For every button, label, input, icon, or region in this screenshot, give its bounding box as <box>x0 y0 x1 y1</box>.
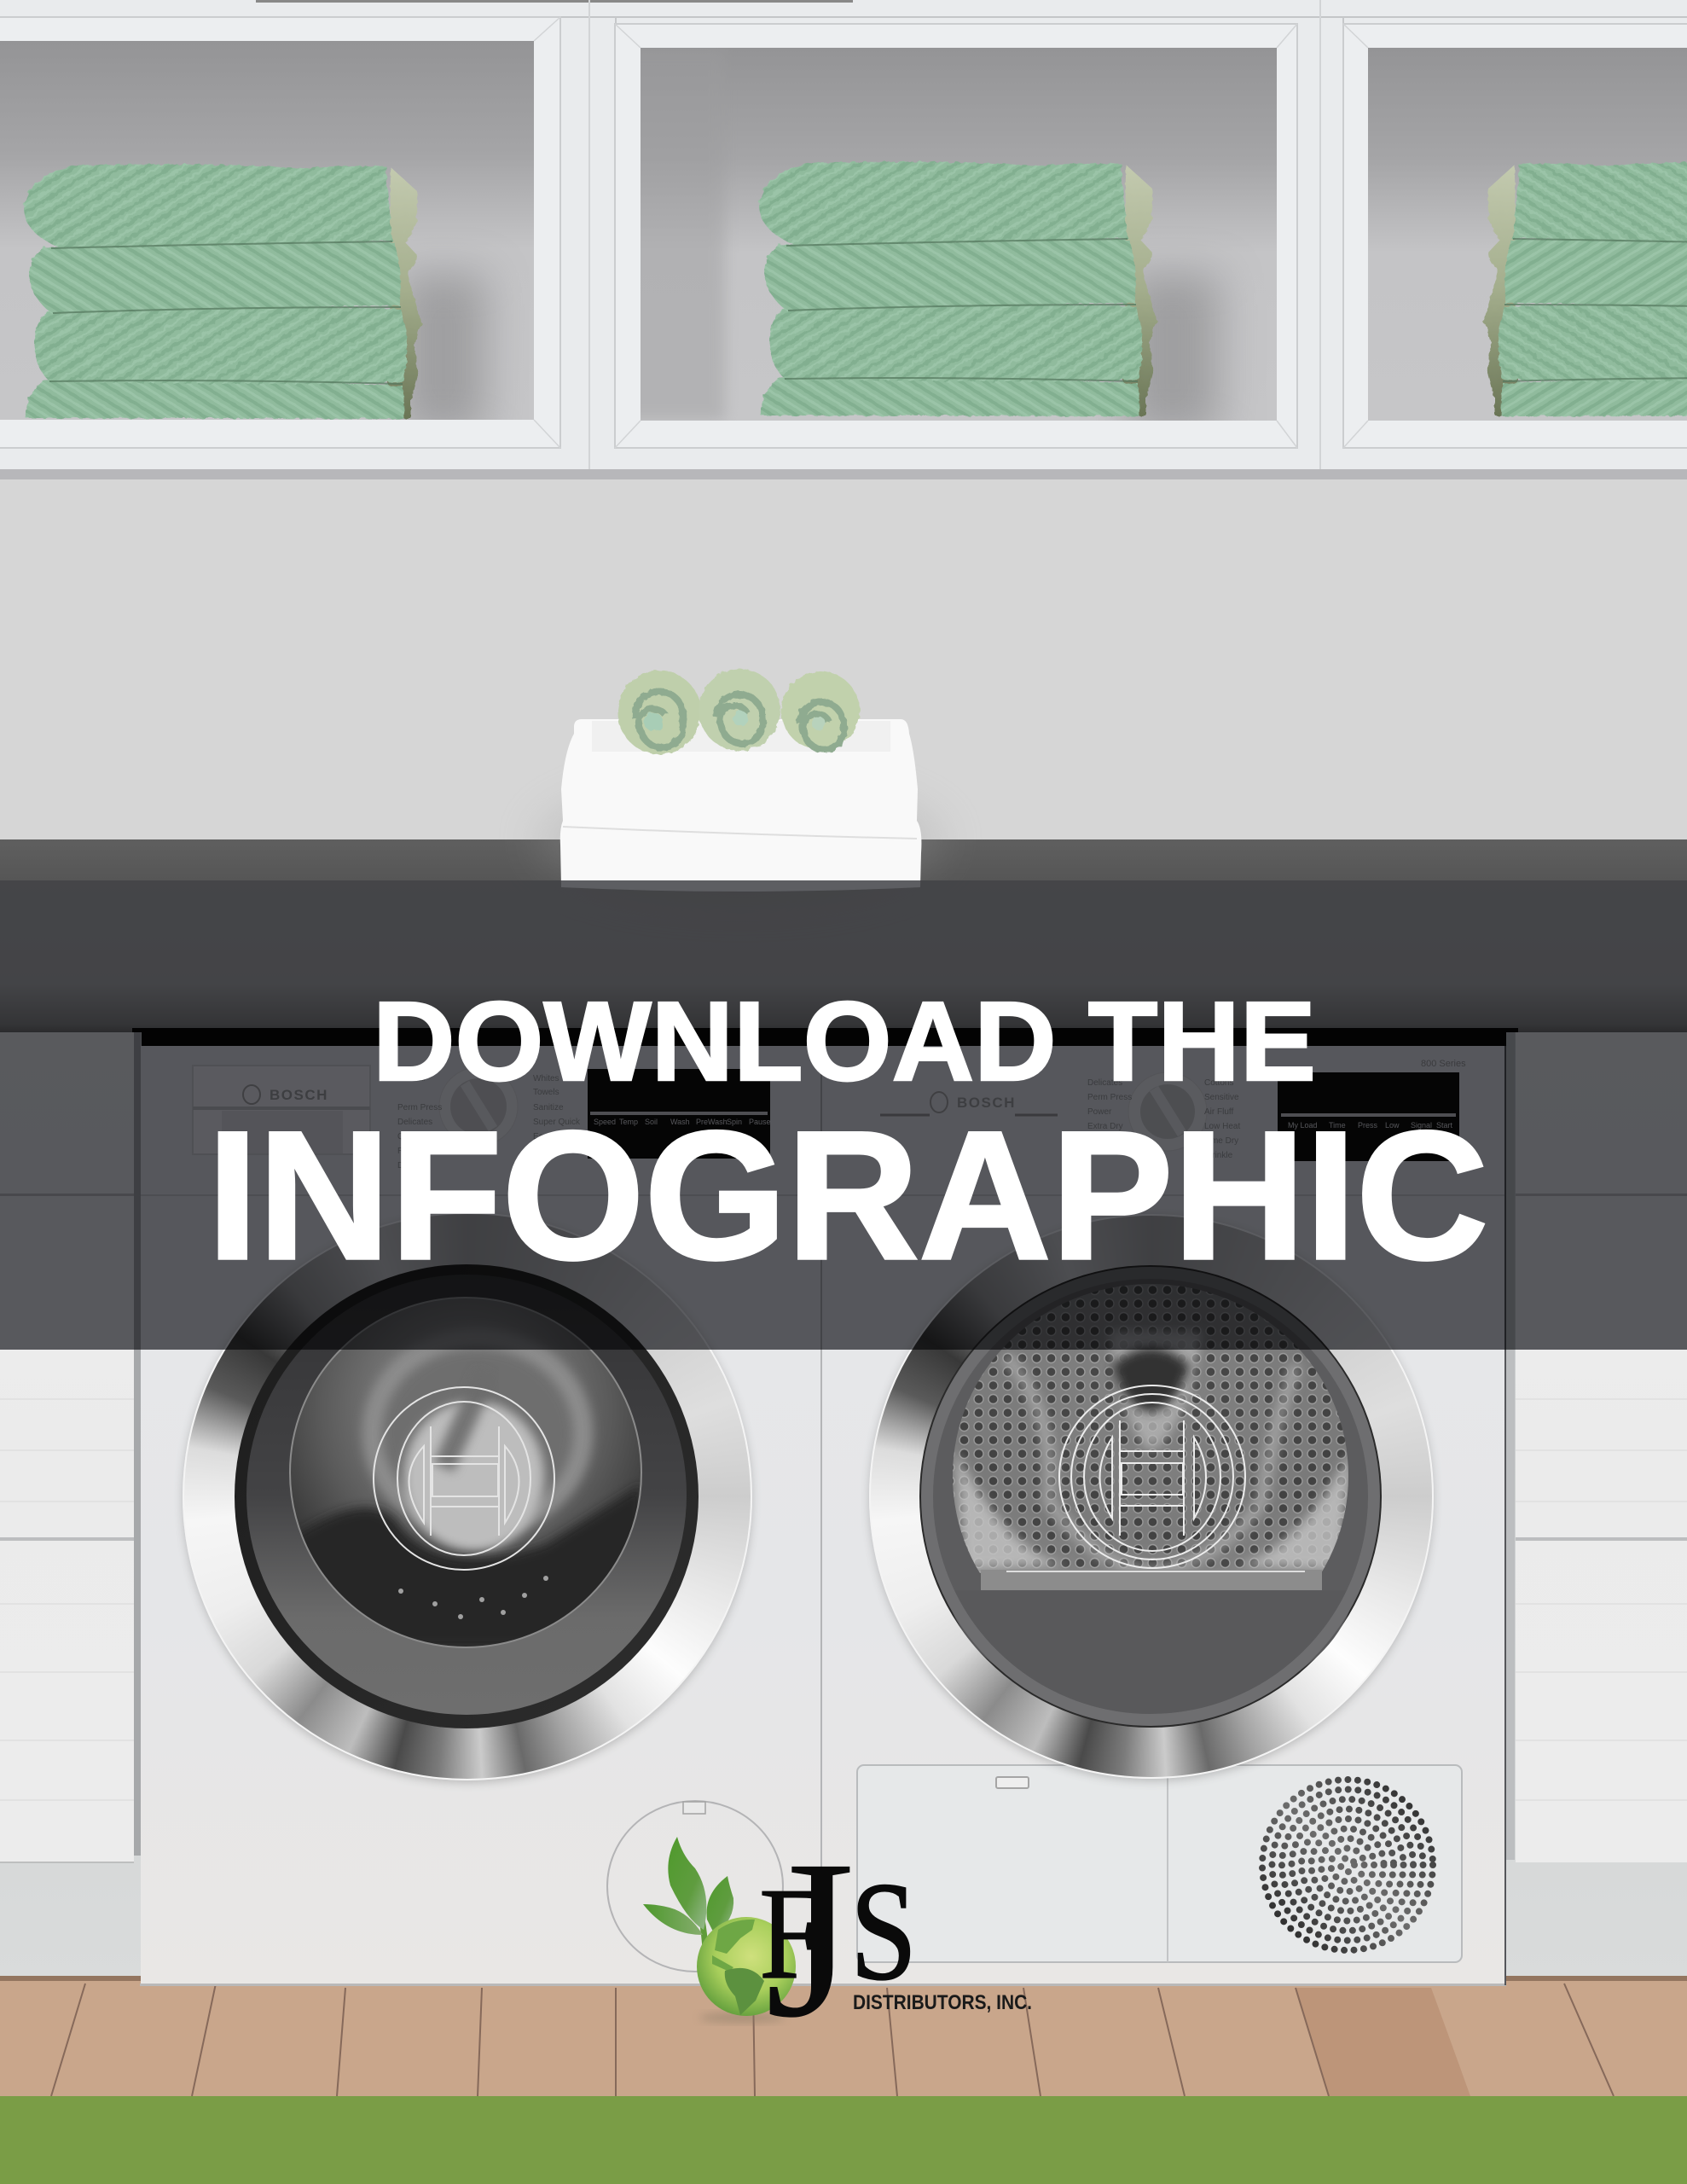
dryer door chrome ring <box>869 1214 1434 1779</box>
washer cycle labels: Rinse/Spin <box>397 1147 438 1156</box>
dryer door <box>919 1265 1382 1728</box>
wall <box>0 479 1687 841</box>
green towel stack: right <box>1484 162 1687 416</box>
right side cabinet <box>1506 1032 1687 1979</box>
washer display: Temp <box>619 1118 638 1126</box>
washer door <box>235 1264 699 1728</box>
dryer cycle labels: Power <box>1087 1107 1112 1117</box>
washer display: Spin <box>727 1118 742 1126</box>
dryer brand plate <box>880 1092 1058 1115</box>
dryer display: My Load <box>1288 1121 1318 1130</box>
series label: 800 Series <box>1421 1059 1466 1069</box>
washer cycle labels: Sanitize <box>533 1103 564 1112</box>
dark translucent title band <box>0 880 1687 1350</box>
logo globe with leaves <box>643 1837 796 2023</box>
counter top <box>0 839 1687 880</box>
washer cycle labels: Drain <box>397 1161 418 1170</box>
recess shadow above machines <box>132 1028 1518 1048</box>
dryer display: Time <box>1329 1121 1346 1130</box>
dryer cycle labels: Wrinkle <box>1204 1151 1233 1160</box>
dryer cycle labels: Delicates <box>1087 1078 1122 1088</box>
rolled green towels <box>617 669 860 754</box>
dryer cycle labels: Air Fluff <box>1204 1107 1233 1117</box>
washer body <box>140 1046 822 1986</box>
roll two <box>699 669 780 751</box>
dryer cycle labels <box>1087 1078 1240 1160</box>
logo tagline: DISTRIBUTORS, INC. <box>853 1991 1032 2014</box>
wood floor <box>0 1976 1687 2096</box>
washer glass <box>290 1298 641 1647</box>
dryer display: Press <box>1358 1121 1378 1130</box>
dryer display: Start <box>1436 1121 1453 1130</box>
washer program dial <box>439 1067 518 1146</box>
dryer lower panel <box>857 1765 1462 1962</box>
dryer display: Signal <box>1411 1121 1432 1130</box>
dryer cycle labels: Quick 40 <box>1087 1136 1122 1146</box>
dryer display: Low <box>1385 1121 1400 1130</box>
washer cycle labels: Super Quick <box>533 1118 581 1127</box>
logo letter S: S <box>850 1853 917 2009</box>
dryer lower glass shade <box>945 1590 1356 1716</box>
detergent dispenser <box>193 1066 370 1154</box>
white folded towels <box>536 719 945 900</box>
dryer program dial <box>1128 1072 1207 1151</box>
dryer drum <box>938 1280 1365 1574</box>
roll one <box>617 671 701 754</box>
washer cycle labels <box>397 1074 581 1170</box>
washer cycle labels: Whites <box>533 1074 559 1083</box>
dryer cycle labels: Extra Dry <box>1087 1122 1123 1131</box>
washer and dryer door glass <box>235 1264 1382 1728</box>
dryer display <box>1278 1072 1459 1161</box>
title: download the: DOWNLOAD THE <box>373 979 1316 1104</box>
washer lint hatch outline <box>607 1801 783 1972</box>
counter front <box>0 880 1687 1032</box>
open shelving unit <box>0 0 1687 479</box>
washer door chrome ring <box>183 1212 752 1780</box>
washer cycle labels: Normal <box>397 1074 425 1083</box>
title: infographic: INFOGRAPHIC <box>207 1094 1488 1298</box>
dryer cycle labels: Time Dry <box>1204 1136 1238 1146</box>
dryer cycle labels: Cottons <box>1204 1078 1233 1088</box>
green footer bar <box>0 2096 1687 2184</box>
shelf frame: left <box>0 17 560 448</box>
dryer vent grille <box>1262 1780 1433 1950</box>
roll three <box>781 671 860 750</box>
washer display: PreWash <box>696 1118 728 1126</box>
washer cycle labels: Quick 30 <box>397 1132 432 1141</box>
dryer brand plate: BOSCH <box>957 1095 1016 1111</box>
washer display: Wash <box>670 1118 690 1126</box>
logo letter J: J <box>765 1813 855 2065</box>
dryer cycle labels: Sensitive <box>1204 1093 1239 1102</box>
Bosch emblem on dryer <box>1059 1385 1245 1568</box>
dryer cycle labels: Perm Press <box>1087 1093 1132 1102</box>
Bosch emblem on washer <box>374 1387 554 1570</box>
washer display: Speed <box>594 1118 616 1126</box>
green towel stack: centre <box>759 162 1157 416</box>
washer cycle labels: Easy Care <box>533 1132 573 1141</box>
washer display <box>588 1069 771 1159</box>
dryer cycle labels: Low Heat <box>1204 1122 1240 1131</box>
shelf frame: centre <box>614 24 1297 448</box>
washer cycle labels: Perm Press <box>397 1103 442 1112</box>
dryer body <box>820 1046 1506 1986</box>
washer display: Pause <box>749 1118 771 1126</box>
washer cycle labels: Towels <box>533 1088 559 1097</box>
left side cabinet <box>0 1032 142 1979</box>
shelf frame: right <box>1343 24 1687 448</box>
logo letter F: F <box>759 1862 824 2007</box>
FJS Distributors logo <box>643 1813 1032 2065</box>
washer cycle labels: Delicates <box>397 1118 432 1127</box>
detergent dispenser: BOSCH <box>270 1087 328 1103</box>
green towel stack: left <box>24 165 421 419</box>
washer display: Soil <box>645 1118 658 1126</box>
